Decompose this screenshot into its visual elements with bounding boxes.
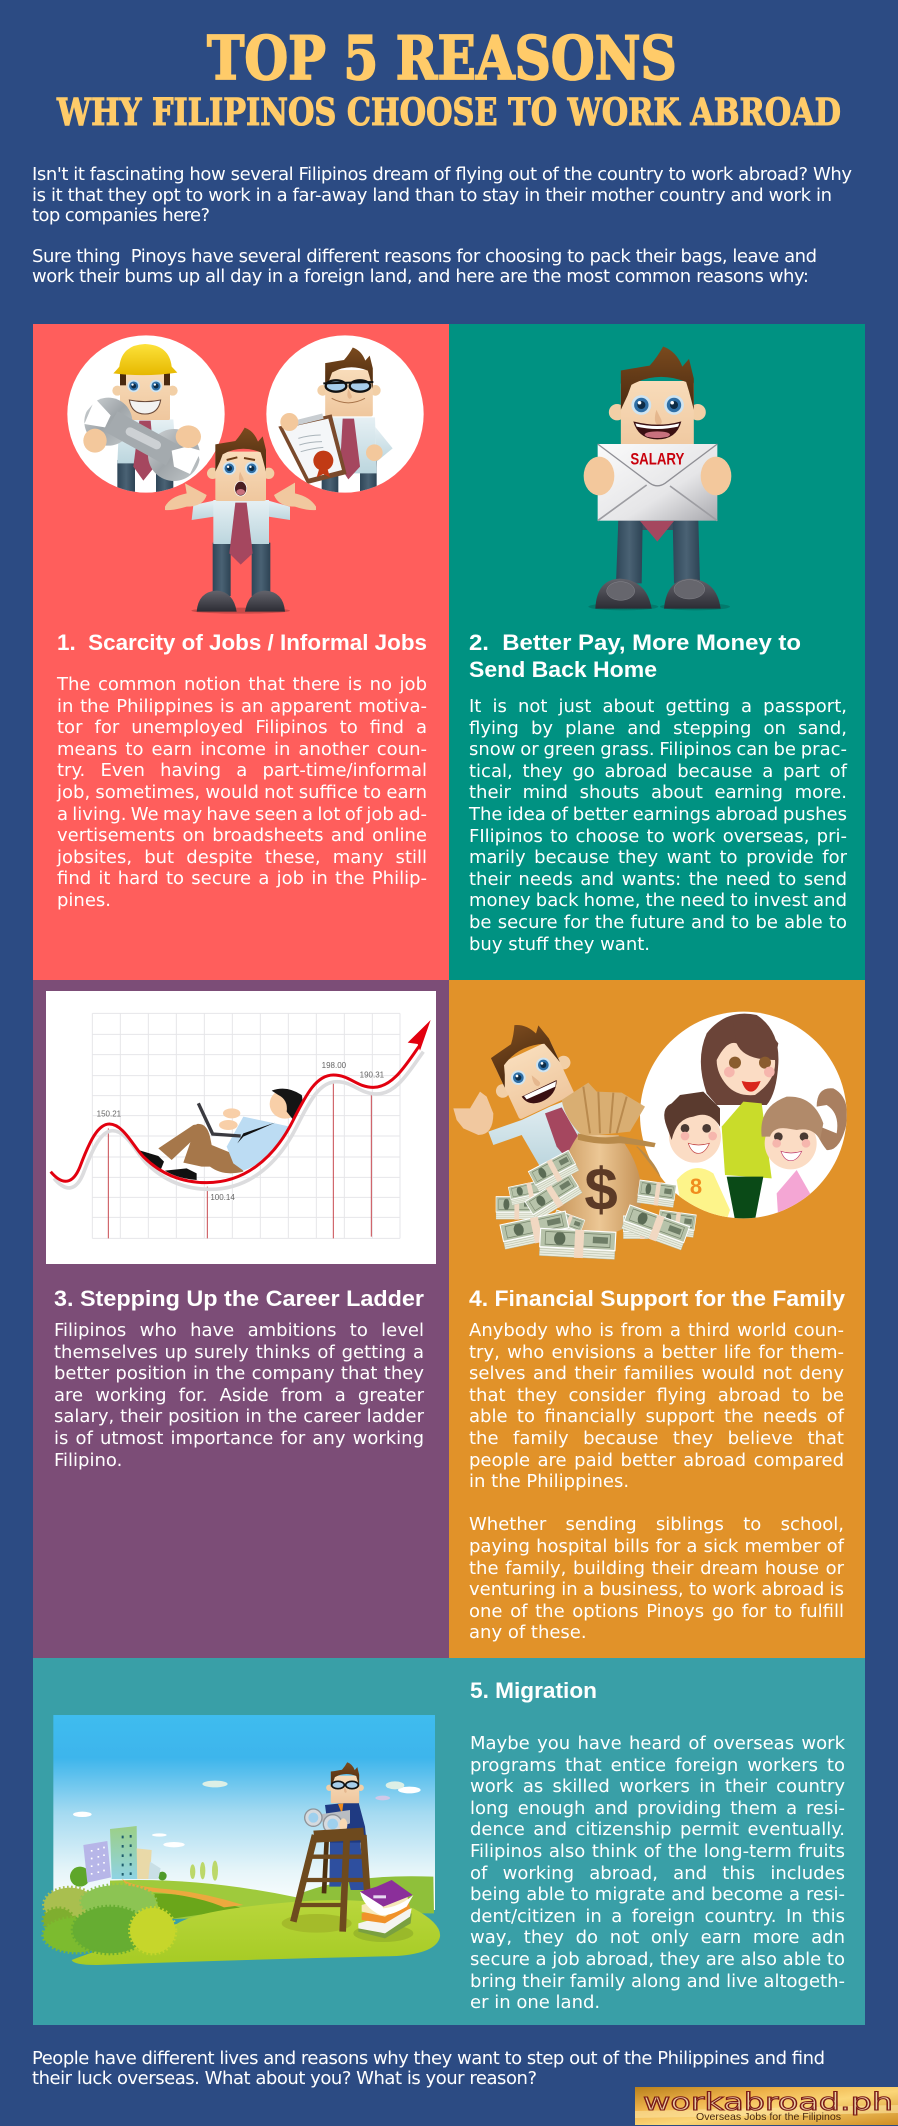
body text 1: find it hard to secure a job in the Philip-	[57, 868, 427, 889]
body text 2: FIlipinos to choose to work overseas, pri-	[469, 826, 847, 847]
illustration: man reclining on rising chart: 198.00	[322, 1061, 347, 1070]
heading 1: 1. Scarcity of Jobs / Informal Jobs	[57, 630, 427, 655]
body text 5: long enough and providing them a resi-	[470, 1798, 845, 1819]
body text 1	[56, 674, 427, 911]
body text 4: the family because they believe that	[469, 1428, 844, 1449]
body text 2: snow or green grass. Filipinos can be prac-	[469, 739, 847, 760]
panel: 3 career ladder	[33, 980, 449, 1658]
closing text: People have different lives and reasons why they want to step out of the Philippines and find	[32, 2048, 825, 2069]
body text 1: job, sometimes, would not suffice to earn	[57, 782, 427, 803]
body text 4: try, who envisions a better life for them-	[469, 1342, 844, 1363]
illustration: man reclining on rising chart	[46, 991, 436, 1264]
panel: 1 scarcity of jobs	[33, 324, 449, 980]
panel: 5 migration	[33, 1658, 865, 2025]
intro text: top companies here?	[32, 205, 210, 226]
body text 4: any of these.	[469, 1622, 587, 1643]
body text 1: in the Philippines is an apparent motiva-	[57, 696, 427, 717]
title	[56, 24, 841, 134]
body text 4: paying hospital bills for a sick member of	[469, 1536, 844, 1557]
illustration: man with money bag and family	[453, 1012, 847, 1260]
body text 5: being able to migrate and become a resi-	[470, 1884, 845, 1905]
heading 4: 4. Financial Support for the Family	[469, 1286, 846, 1311]
body text 4	[469, 1320, 844, 1643]
body text 5: of working abroad, and this includes	[470, 1863, 845, 1884]
body text 3: is of utmost importance for any working	[54, 1428, 424, 1449]
body text 2: money back home, the need to invest and	[469, 890, 847, 911]
body text 2: their needs and wants: the need to send	[469, 869, 847, 890]
illustration: three office workers	[67, 335, 424, 614]
illustration: man reclining on rising chart: 150.21	[97, 1110, 122, 1119]
heading 5: 5. Migration	[470, 1678, 597, 1703]
logo: workabroad.ph	[635, 2087, 898, 2125]
body text 3: better position in the company that they	[54, 1363, 424, 1384]
body text 5: bring their family along and live altogeth-	[470, 1971, 845, 1992]
body text 5: way, they do not only earn more adn	[470, 1927, 845, 1948]
body text 3: are working for. Aside from a greater	[54, 1385, 424, 1406]
heading 2: 2. Better Pay, More Money to	[469, 630, 801, 655]
intro text	[32, 164, 852, 287]
body text 5	[470, 1733, 845, 2013]
body text 1: jobsites, but despite these, many still	[57, 847, 427, 868]
body text 3	[54, 1320, 424, 1471]
body text 4: Anybody who is from a third world coun-	[469, 1320, 844, 1341]
body text 3: themselves up surely thinks of getting a	[54, 1342, 424, 1363]
body text 5: er in one land.	[470, 1992, 600, 2013]
body text 4: that they consider flying abroad to be	[469, 1385, 844, 1406]
body text 4: people are paid better abroad compared	[469, 1450, 844, 1471]
body text 4: one of the options Pinoys go for to fulfill	[469, 1601, 844, 1622]
illustration: man with money bag and family: $	[584, 1156, 618, 1223]
heading 2	[469, 630, 801, 682]
intro text: Sure thing Pinoys have several different reasons for choosing to pack their bags, leave and	[32, 246, 817, 267]
body text 2: tical, they go abroad because a part of	[469, 761, 847, 782]
body text 3: Filipinos who have ambitions to level	[54, 1320, 424, 1341]
body text 2: It is not just about getting a passport,	[469, 696, 847, 717]
illustration: man holding salary envelope	[584, 346, 732, 610]
body text 5: dence and citizenship permit eventually.	[470, 1819, 845, 1840]
subtitle: WHY FILIPINOS CHOOSE TO WORK ABROAD	[56, 91, 841, 134]
body text 4: able to financially support the needs of	[469, 1406, 844, 1427]
body text 4: selves and their families would not deny	[469, 1363, 844, 1384]
body text 2: their mind shouts about earning more.	[469, 782, 847, 803]
body text 2: marily because they want to provide for	[469, 847, 847, 868]
body text 5: secure a job abroad, they are also able to	[470, 1949, 845, 1970]
body text 2: The idea of better earnings abroad pushes	[469, 804, 847, 825]
panel: 2 better pay	[449, 324, 865, 980]
body text 5: dent/citizen in a foreign country. In this	[470, 1906, 845, 1927]
illustration: man holding salary envelope: SALARY	[630, 450, 684, 469]
body text 1: try. Even having a part-time/informal	[57, 760, 427, 781]
body text 1: tor for unemployed Filipinos to find a	[57, 717, 427, 738]
body text 1: vertisements on broadsheets and online	[57, 825, 427, 846]
closing text: their luck overseas. What about you? What is your reason?	[32, 2068, 537, 2089]
body text 5: Maybe you have heard of overseas work	[470, 1733, 845, 1754]
panel: 4 financial support	[449, 980, 865, 1658]
intro text: work their bums up all day in a foreign land, and here are the most common reasons why:	[32, 266, 809, 287]
body text 5: work as skilled workers in their country	[470, 1776, 845, 1797]
body text 2: flying by plane and stepping on sand,	[469, 718, 847, 739]
heading 3: 3. Stepping Up the Career Ladder	[54, 1286, 424, 1311]
body text 4: the family, building their dream house or	[469, 1558, 844, 1579]
body text 1: means to earn income in another coun-	[57, 739, 427, 760]
intro text: Isn't it fascinating how several Filipinos dream of flying out of the country to work abroad? Why	[32, 164, 852, 185]
body text 4: in the Philippines.	[469, 1471, 629, 1492]
body text 1: The common notion that there is no job	[57, 674, 427, 695]
illustration: man reclining on rising chart: 190.31	[360, 1071, 385, 1080]
intro text: is it that they opt to work in a far-away land than to stay in their mother country and work in	[32, 185, 832, 206]
illustration: man reclining on rising chart: 100.14	[210, 1193, 235, 1202]
logo: workabroad.ph: Overseas Jobs for the Filipinos	[696, 2111, 841, 2123]
illustration: man with money bag and family: 8	[690, 1174, 702, 1199]
body text 5: Filipinos also think of the long-term fruits	[470, 1841, 845, 1862]
body text 1: pines.	[57, 890, 111, 911]
main title: top 5 reasons: TOP 5 REASONS	[207, 24, 677, 94]
closing text	[32, 2048, 825, 2089]
body text 2	[468, 696, 848, 955]
heading 2: Send Back Home	[469, 657, 657, 682]
body text 4: venturing in a business, to work abroad is	[469, 1579, 844, 1600]
body text 5: programs that entice foreign workers to	[470, 1755, 845, 1776]
body text 2: be secure for the future and to be able to	[469, 912, 847, 933]
illustration: man on ladder looking through binoculars	[41, 1715, 440, 1965]
body text 1: a living. We may have seen a lot of job ad-	[57, 804, 427, 825]
body text 4: Whether sending siblings to school,	[469, 1514, 844, 1535]
body text 2: buy stuff they want.	[469, 934, 650, 955]
body text 3: Filipino.	[54, 1450, 122, 1471]
logo: workabroad.ph: workabroad.ph	[643, 2088, 893, 2116]
body text 3: salary, their position in the career ladder	[54, 1406, 424, 1427]
